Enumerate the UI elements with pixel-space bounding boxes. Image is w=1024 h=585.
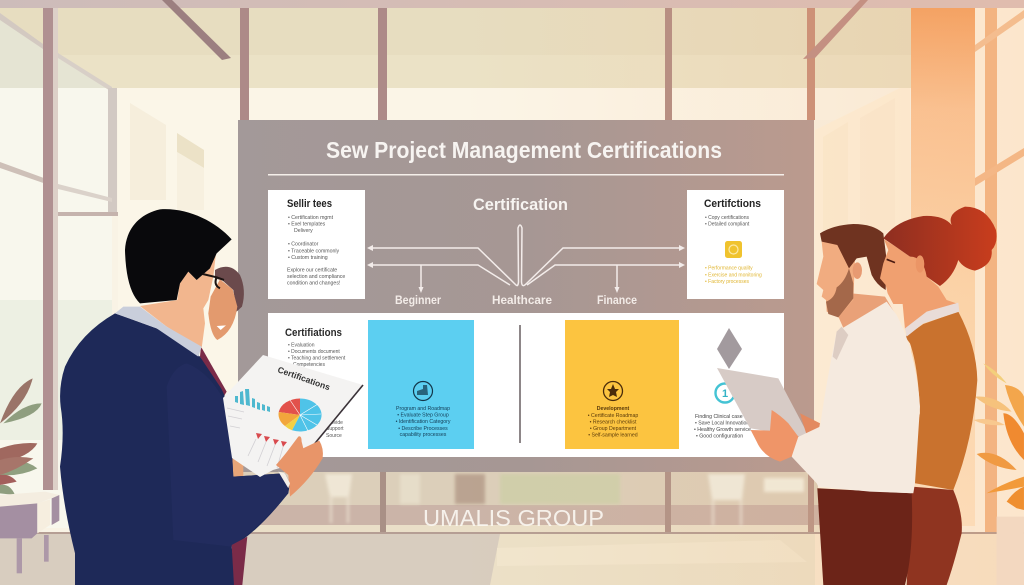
panel: left info card: Delivery [294, 228, 313, 234]
icon: yellow card badge [604, 382, 622, 400]
lower strip bullet list [288, 342, 346, 439]
card: blue: • Describe Processes [398, 426, 448, 432]
panel: left info card: • Coordinator [288, 242, 319, 248]
card: blue: capability processes [400, 432, 447, 438]
plant right [973, 363, 1024, 585]
neck and face [140, 253, 216, 348]
label: beginner: Beginner [395, 293, 441, 307]
lower strip bullet list: Provide [326, 420, 343, 426]
panel: right info card: • Detailed compliant [705, 222, 750, 228]
report markers [256, 433, 287, 447]
label: finance: Finance [597, 293, 637, 307]
sleeve [167, 363, 288, 547]
lower strip bullet list: • Documents document [288, 349, 340, 355]
text block: right column: Finding Clinical case [695, 414, 743, 420]
panel: left info card: condition and changes! [287, 280, 340, 286]
report held by man [223, 355, 363, 477]
lower strip bullet list: Competencies [293, 362, 325, 368]
woman's head and collar [880, 207, 997, 337]
report lines [227, 408, 283, 468]
beard [826, 268, 853, 317]
card: yellow: Development [597, 406, 630, 412]
interior furniture behind glass [325, 474, 804, 526]
text block: right column: • Healthy Growth service [694, 427, 751, 433]
icon: yellow badge [725, 241, 742, 258]
card: yellow: • Self-sample learned [588, 432, 638, 438]
panel: right info card: • Performance quality [705, 266, 753, 272]
ceiling light left [162, 0, 231, 60]
text block: right column: • Good configuration [696, 434, 743, 440]
panel: right info card: Certifctions [704, 198, 761, 210]
panel: right info card: • Factory processes [705, 279, 749, 285]
trousers [817, 488, 912, 585]
panel: left info card: • Custom training [288, 255, 328, 261]
brand wordmark: UMALIS GROUP [423, 505, 604, 531]
figure: man in white shirt [717, 224, 920, 585]
panel: right info card: • Copy certifications [705, 215, 749, 221]
collar [115, 307, 202, 357]
label: healthcare: Healthcare [492, 293, 552, 307]
panel: left info card: • Traceable commonly [288, 248, 340, 254]
text block: right column [694, 414, 752, 440]
hair [820, 224, 887, 290]
ear [853, 262, 862, 279]
panel: right info card [687, 190, 784, 299]
neck [838, 293, 895, 332]
hand holding report [276, 436, 323, 497]
hair [125, 209, 232, 303]
card: blue: • Evaluate Step Group [397, 412, 449, 418]
collar shadow [833, 327, 848, 360]
jacket [60, 313, 290, 585]
tablet [717, 368, 810, 438]
back hand [800, 413, 820, 441]
front hand [751, 410, 798, 462]
figure: man in navy suit [60, 209, 290, 585]
plant and side table left [0, 378, 59, 573]
ceiling light right [803, 0, 868, 59]
panel: left info card: selection and compliance [287, 274, 345, 280]
title: Sew Project Management Certifications [326, 137, 722, 163]
panel: right info card: • Exercise and monitoring [705, 272, 762, 278]
panel: left info card: Explore our certificate [287, 268, 337, 274]
card: yellow [565, 320, 679, 449]
face [817, 242, 855, 317]
lower strip heading: Certifiations [285, 327, 342, 339]
report pie chart [279, 398, 322, 431]
icon: teal number badge [716, 384, 734, 402]
card: yellow: • Research checklist [590, 420, 637, 426]
icon: blue card badge [414, 382, 432, 400]
icon: diamond [717, 328, 742, 369]
card: blue: • Identification Category [396, 419, 451, 425]
card: yellow: • Certificate Roadmap [588, 413, 638, 419]
tie tail [232, 537, 247, 585]
heading: certification: Certification [473, 195, 568, 214]
flow diagram arrows [367, 225, 685, 293]
card: yellow: • Group Department [590, 426, 637, 432]
panel: left info card [268, 190, 365, 299]
report title: Certifications [276, 364, 332, 392]
card: blue [368, 320, 474, 449]
shirt [792, 302, 920, 493]
glasses [203, 274, 224, 288]
card: blue: Program and Roadmap [396, 406, 450, 412]
figure: woman behind man, left [200, 267, 244, 487]
lower strip bullet list: • Evaluation [288, 342, 315, 348]
figure: woman body in orange sweater [905, 312, 977, 585]
lower strip bullet list: • Teaching and settlement [288, 356, 346, 362]
lower strip bullet list: Support [326, 426, 344, 432]
panel: lower strip [268, 313, 784, 457]
panel: left info card: • Exel templates [288, 222, 326, 228]
text block: right column: • Save Local Innovations [695, 420, 752, 426]
panel: left info card: Sellir tees [287, 198, 332, 210]
icon: teal number badge: 1 [722, 388, 728, 400]
report bars [235, 389, 270, 412]
lower strip bullet list: Source [326, 433, 342, 439]
display board [238, 120, 814, 472]
panel: left info card: • Certification mgmt [288, 215, 334, 221]
